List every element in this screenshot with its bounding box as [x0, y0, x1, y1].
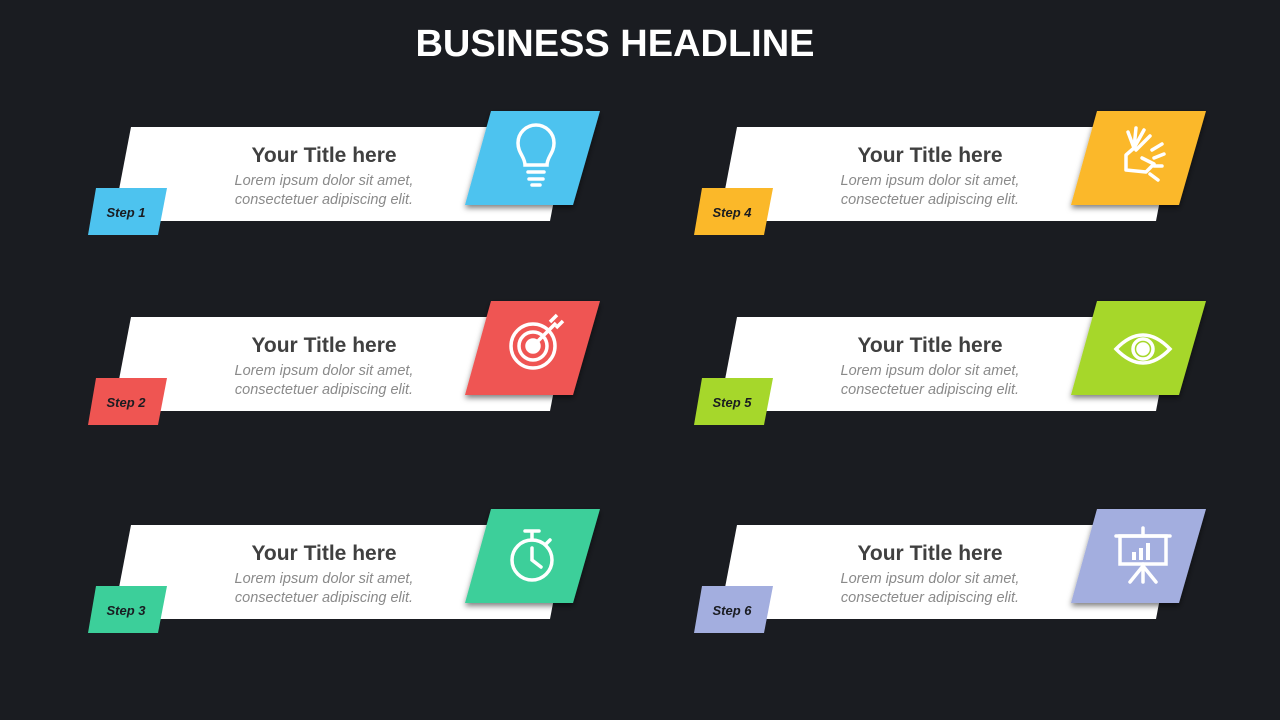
step tab 3: Step 3: [106, 603, 146, 618]
title: BUSINESS HEADLINE: [415, 23, 815, 65]
step tab 5: Step 5: [712, 395, 752, 410]
icon box: lightbulb: [465, 111, 600, 205]
panel: step 3: [88, 509, 600, 633]
step tab 3: [88, 586, 167, 633]
panel: step 5: [694, 301, 1206, 425]
step tab 2: Step 2: [106, 395, 146, 410]
step tab 6: Step 6: [712, 603, 752, 618]
step tab 4: Step 4: [712, 205, 752, 220]
icon box: hands: [1071, 111, 1206, 205]
panel: step 1: [88, 111, 600, 235]
icon box: presentation board: [1071, 509, 1206, 603]
panel: step 6: [694, 509, 1206, 633]
step tab 5: [694, 378, 773, 425]
icon box: stopwatch: [465, 509, 600, 603]
panel: step 2: [88, 301, 600, 425]
icon box: target: [465, 301, 600, 395]
step tab 2: [88, 378, 167, 425]
icon box: eye: [1071, 301, 1206, 395]
step tab 1: Step 1: [106, 205, 146, 220]
panel: step 4: [694, 111, 1206, 235]
step tab 4: [694, 188, 773, 235]
step tab 1: [88, 188, 167, 235]
step tab 6: [694, 586, 773, 633]
